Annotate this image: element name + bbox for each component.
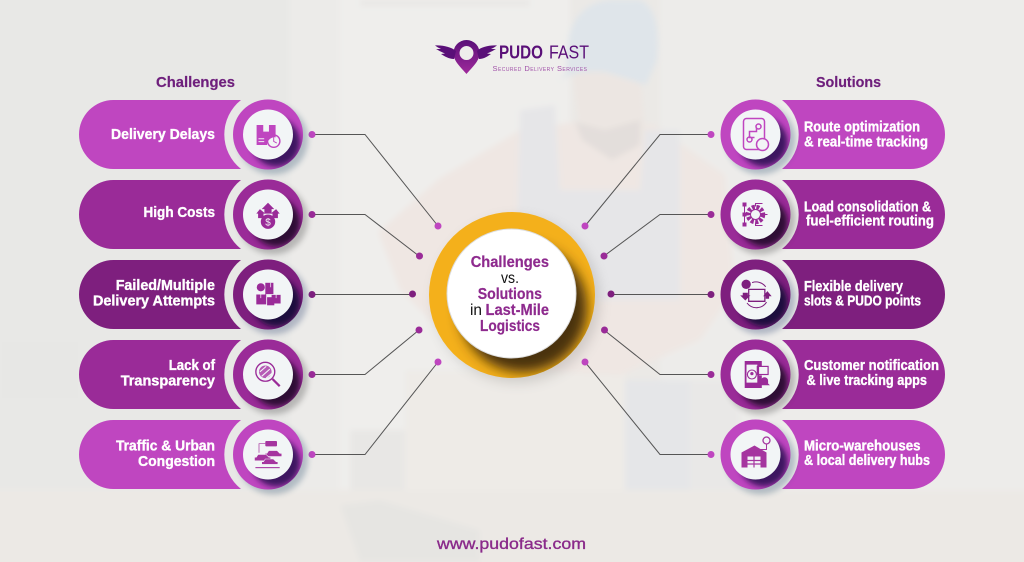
panel: challenge Delivery Delays xyxy=(79,100,308,174)
label: & real-time tracking xyxy=(804,135,928,151)
centre title: Logistics xyxy=(480,318,540,335)
label: & local delivery hubs xyxy=(804,453,930,469)
logo tagline: Secured Delivery Services xyxy=(492,64,588,73)
icon: gear with routes xyxy=(720,180,796,254)
label xyxy=(121,358,215,390)
panel: solution Customer notification xyxy=(720,340,945,414)
panel: solution Micro-warehouses xyxy=(720,420,945,494)
label: Micro-warehouses xyxy=(804,439,920,455)
label xyxy=(804,279,921,310)
panel: solution Flexible delivery slots xyxy=(720,260,945,334)
label: & live tracking apps xyxy=(806,373,927,389)
label: Transparency xyxy=(121,374,215,390)
panel: challenge High Costs xyxy=(79,180,308,254)
label: Failed/Multiple xyxy=(116,278,215,294)
label: High Costs xyxy=(144,205,215,221)
panel: solution Load consolidation xyxy=(720,180,945,254)
label xyxy=(804,120,928,151)
label: Delivery Delays xyxy=(111,127,215,143)
label xyxy=(93,278,215,310)
icon: warehouse with pin xyxy=(720,420,796,494)
centre title: Last-Mile xyxy=(486,302,549,319)
logo icon: winged pin xyxy=(435,40,497,74)
label: Load consolidation & xyxy=(804,199,931,215)
connector lines xyxy=(312,134,711,454)
centre title xyxy=(470,254,549,335)
logo wordmark second word: FAST xyxy=(549,42,589,62)
icon: parcel with clock and arrows xyxy=(720,260,796,334)
heading: Challenges: Challenges xyxy=(156,74,235,91)
label xyxy=(804,439,930,469)
gold ring xyxy=(429,212,600,383)
icon: phone with bell xyxy=(720,340,796,414)
label: Congestion xyxy=(138,454,215,470)
logo wordmark: PUDO xyxy=(499,42,543,62)
label xyxy=(804,358,939,389)
panel: challenge Traffic & Urban Congestion xyxy=(79,420,308,494)
icon: magnifier xyxy=(233,340,308,414)
label: fuel-efficient routing xyxy=(806,214,934,230)
centre title: Solutions xyxy=(478,286,542,303)
panel: solution Route optimization xyxy=(720,100,945,174)
panel: challenge Failed/Multiple Delivery Attempts xyxy=(79,260,308,334)
icon: cars in traffic xyxy=(233,420,308,494)
icon: stacked parcels xyxy=(233,260,308,334)
label xyxy=(804,199,934,230)
heading: Solutions: Solutions xyxy=(816,74,881,91)
centre title: Challenges xyxy=(471,254,549,271)
label: Flexible delivery xyxy=(804,279,903,295)
label xyxy=(116,439,215,470)
label: Traffic & Urban xyxy=(116,439,215,455)
label: Customer notification xyxy=(804,358,939,374)
icon: phone route map xyxy=(720,100,796,174)
website footer: www.pudofast.com xyxy=(436,536,586,553)
white disc xyxy=(447,229,576,358)
icon: parcel with clock xyxy=(233,100,308,174)
label: Delivery Attempts xyxy=(93,294,215,310)
icon: money with arrows: $ xyxy=(265,217,271,228)
panel: challenge Lack of Transparency xyxy=(79,340,308,414)
label: Lack of xyxy=(169,358,215,374)
centre title: in xyxy=(470,302,482,319)
centre hub xyxy=(429,212,600,383)
icon: money with arrows xyxy=(233,180,308,254)
label: slots & PUDO points xyxy=(804,294,921,310)
connector dots xyxy=(308,131,714,458)
logo: PUDO FAST xyxy=(435,40,589,74)
label: Route optimization xyxy=(804,120,920,136)
centre title: vs. xyxy=(501,270,519,287)
